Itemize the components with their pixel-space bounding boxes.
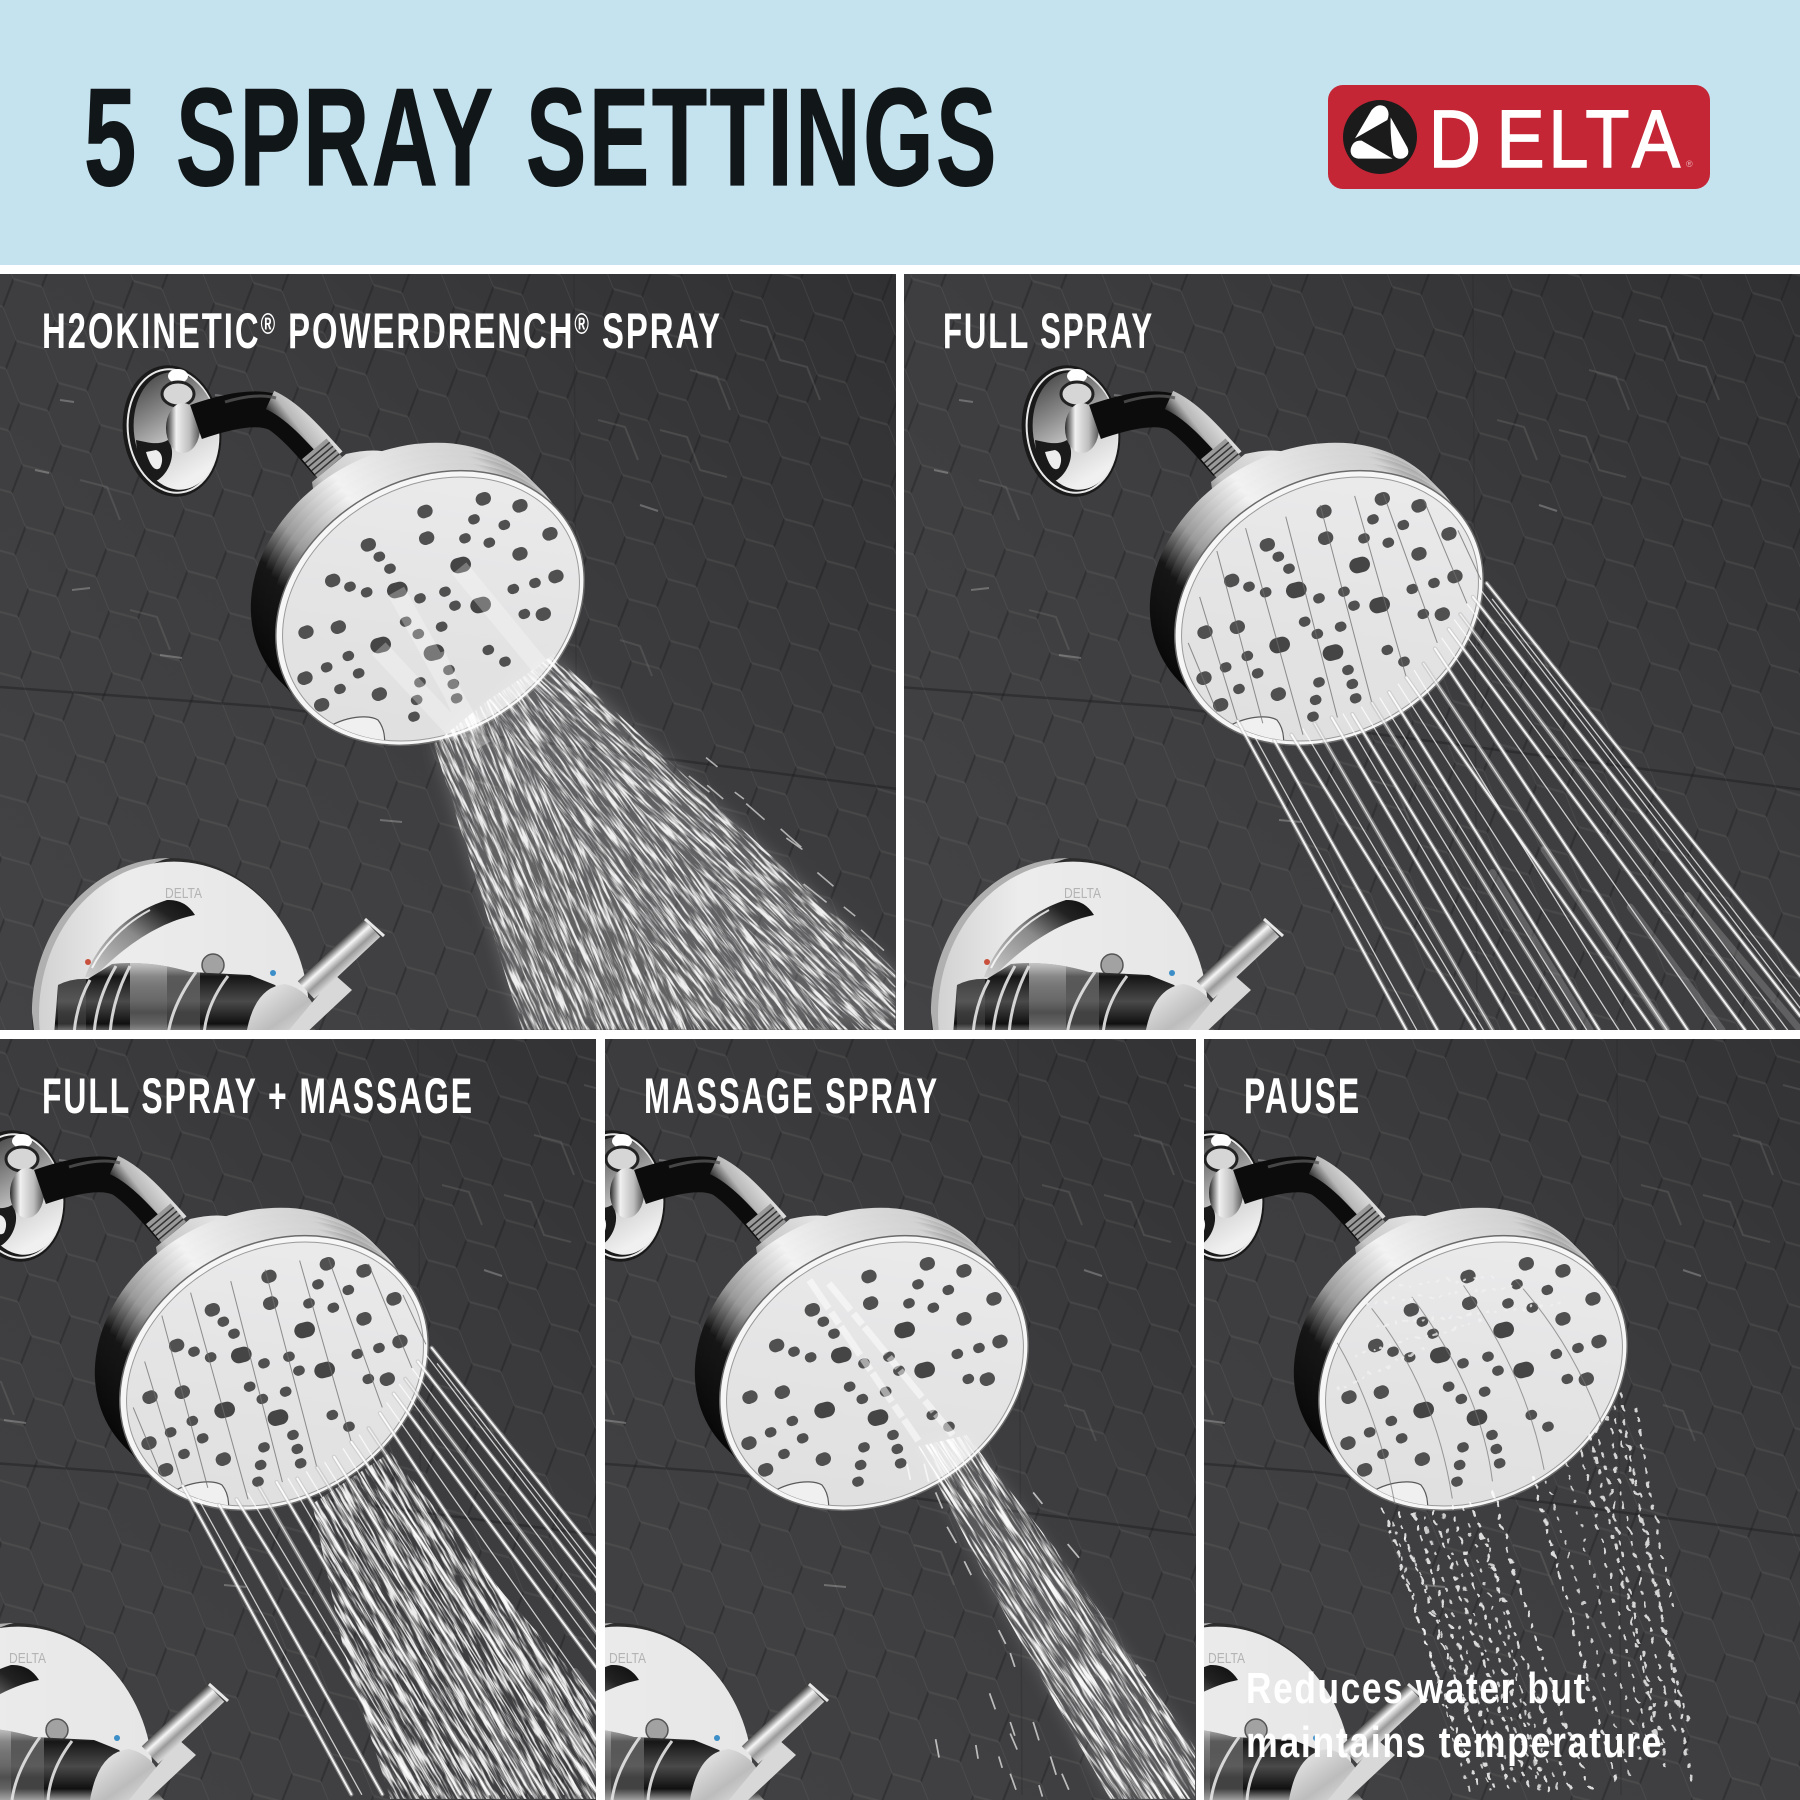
water spray: narrow jet	[809, 1280, 1195, 1799]
panel: full spray + massage	[0, 1039, 596, 1800]
callout: pause note: Reduces water but	[1246, 1664, 1587, 1713]
valve engraving: DELTA	[165, 885, 202, 902]
panel: H2Okinetic PowerDrench spray	[0, 270, 905, 1035]
panel: massage spray	[444, 1035, 1349, 1800]
valve engraving: DELTA	[1064, 885, 1101, 902]
logo: Delta badge	[1328, 85, 1710, 189]
photo: shower head and valve	[0, 1039, 596, 1800]
photo: shower head and valve	[1043, 1035, 1800, 1800]
panel: full spray	[899, 270, 1800, 1035]
heading: H2OKINETIC	[42, 303, 375, 359]
water spray: streams plus massage	[133, 1258, 745, 1799]
logo: Delta badge: ®	[1686, 159, 1693, 169]
water spray: dense drench cone	[379, 568, 895, 1030]
header band	[0, 0, 1800, 265]
heading: FULL SPRAY + MASSAGE	[42, 1068, 474, 1124]
valve engraving: DELTA	[1208, 1650, 1245, 1667]
heading: ®	[261, 308, 277, 341]
heading: MASSAGE SPRAY	[644, 1068, 939, 1124]
water spray: fine streams	[1188, 494, 1800, 1030]
heading: ®	[574, 308, 591, 341]
title: SPRAY	[176, 60, 494, 215]
callout: pause note: maintains temperature	[1246, 1718, 1663, 1767]
photo: shower head and valve	[444, 1035, 1349, 1800]
photo: shower head and valve	[899, 270, 1800, 1035]
water spray: reduced droplets	[1337, 1277, 1692, 1791]
valve engraving: DELTA	[609, 1650, 646, 1667]
title: SETTINGS	[526, 60, 999, 215]
valve engraving: DELTA	[9, 1650, 46, 1667]
photo: shower head and valve	[0, 270, 905, 1035]
logo: Delta badge: DELTA	[1429, 94, 1681, 185]
heading: PAUSE	[1244, 1068, 1361, 1124]
heading: FULL SPRAY	[943, 303, 1154, 359]
heading: SPRAY	[591, 303, 722, 359]
panel: pause	[1043, 1035, 1800, 1800]
title: 5	[84, 60, 139, 215]
heading: POWERDRENCH	[277, 303, 574, 359]
